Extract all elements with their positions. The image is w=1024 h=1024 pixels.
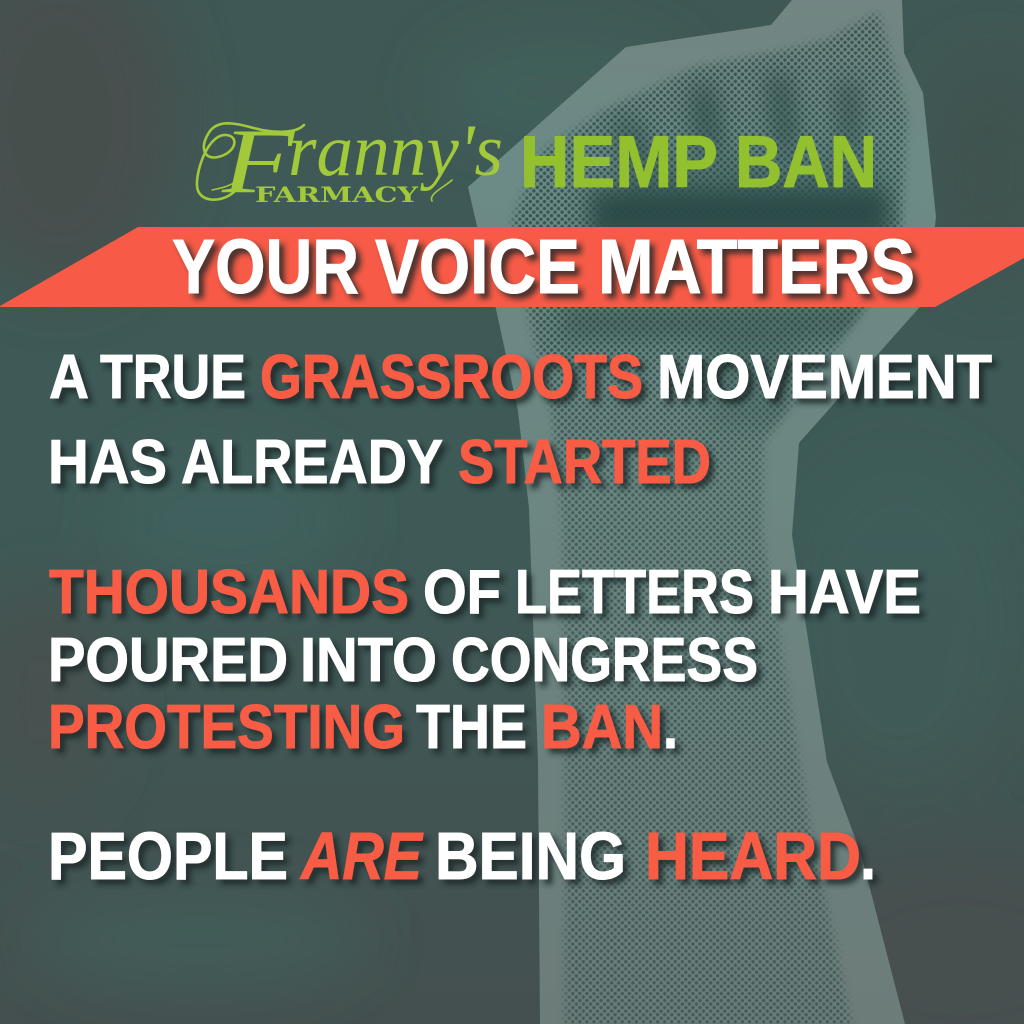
statement: people are being heard: HEARD (645, 819, 861, 894)
line 1: A (49, 343, 89, 412)
line 1 (49, 343, 992, 412)
line 5 (48, 693, 678, 762)
line 5: BAN (541, 693, 663, 762)
halftone fist (509, 10, 910, 1024)
line 3 (49, 558, 921, 627)
statement: thousands of letters (48, 558, 921, 762)
line 4: INTO (300, 626, 437, 695)
raised fist illustration (468, 0, 936, 1024)
statement: people are being heard: . (860, 819, 876, 894)
brand logo: Franny's Farmacy: ranny's (288, 110, 503, 192)
statement: people are being heard: BEING (435, 819, 626, 894)
brand logo: Franny's Farmacy (197, 110, 503, 212)
banner headline: YOUR (172, 224, 359, 310)
line 5: PROTESTING (48, 693, 405, 762)
line 3: OF (423, 558, 501, 627)
logo script name: F (221, 110, 295, 212)
line 2: STARTED (458, 428, 711, 497)
heading: hemp ban: BAN (735, 122, 877, 203)
statement: grassroots movement (48, 343, 992, 497)
line 3: THOUSANDS (49, 558, 409, 627)
heading: hemp ban (520, 122, 877, 203)
line 2: HAS (48, 428, 167, 497)
banner headline (172, 224, 915, 310)
line 1: MOVEMENT (657, 343, 992, 412)
line 4: CONGRESS (451, 626, 758, 695)
heading: hemp ban: HEMP (520, 122, 718, 203)
line 3: HAVE (768, 558, 921, 627)
banner headline: MATTERS (598, 224, 915, 310)
fist outline (468, 0, 936, 1024)
line 4 (48, 626, 758, 695)
statement: people are being heard (48, 819, 876, 894)
statement: people are being heard: PEOPLE (48, 819, 288, 894)
line 1: TRUE (100, 343, 246, 412)
line 2: ALREADY (181, 428, 443, 497)
line 2 (48, 428, 711, 497)
line 5: THE (416, 693, 527, 762)
line 1: GRASSROOTS (260, 343, 643, 412)
logo flourish (197, 123, 452, 201)
statement: people are being heard: ARE (299, 819, 424, 894)
line 3: LETTERS (515, 558, 754, 627)
banner (0, 227, 1024, 307)
line 5: . (663, 693, 678, 762)
logo subtitle: FARMACY (255, 182, 419, 207)
line 4: POURED (48, 626, 288, 695)
banner headline: VOICE (375, 224, 580, 310)
